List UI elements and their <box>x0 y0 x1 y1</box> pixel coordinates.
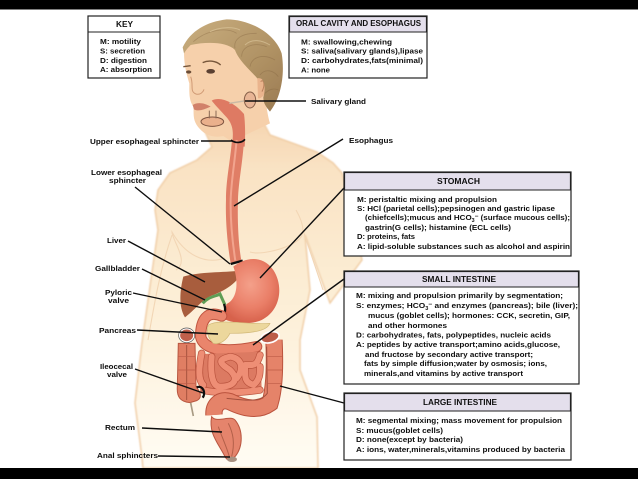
descending and sigmoid colon <box>214 340 275 415</box>
digestive organs <box>177 92 283 462</box>
lower esophageal sphincter <box>231 261 243 264</box>
head <box>183 19 283 142</box>
panel: stomach: (chiefcells);mucus and HCO <box>365 213 465 222</box>
panel: large intestine: A: ions, water,minerals,vitamins produced by bacteria <box>356 445 566 454</box>
panel: small intestine: mucus (goblet cells); hormones: CCK, secretin, GIP, <box>368 311 570 320</box>
panel: key: KEY <box>116 20 134 29</box>
panel: small intestine: S: enzymes; HCO <box>356 301 419 310</box>
anatomical labels: Salivary gland <box>311 97 366 106</box>
anatomical labels: Gallbladder <box>95 264 140 273</box>
anatomical labels: Lower esophageal <box>91 168 162 177</box>
panel: oral cavity and esophagus: ORAL CAVITY AND ESOPHAGUS <box>296 19 422 28</box>
pyloric valve <box>222 304 225 319</box>
anatomical labels: Upper esophageal sphincter <box>90 137 199 146</box>
anatomical labels: Anal sphincters <box>97 451 158 460</box>
anal sphincters <box>227 457 237 462</box>
panel: oral cavity and esophagus: D: carbohydrates,fats(minimal) <box>301 56 424 65</box>
panel: small intestine: and enzymes (pancreas); bile (liver); <box>432 301 578 310</box>
hair strands <box>193 30 278 93</box>
anatomical labels: Ileocecal <box>100 362 133 371</box>
panel: stomach: STOMACH <box>437 177 480 186</box>
panel: stomach: 3 <box>472 218 475 224</box>
chest, arm and abdomen contour lines <box>148 210 323 340</box>
panel: stomach: A: lipid-soluble substances such as alcohol and aspirin <box>357 242 570 251</box>
hair <box>183 19 283 112</box>
leader lines <box>128 101 344 457</box>
anatomical labels: sphincter <box>109 176 146 185</box>
esophagus <box>226 140 244 263</box>
human body figure <box>135 19 362 468</box>
panel: small intestine: M: mixing and propulsion primarily by segmentation; <box>356 291 563 300</box>
bottom black band <box>0 468 638 479</box>
panel: key: M: motility <box>100 37 142 46</box>
panel: small intestine: SMALL INTESTINE <box>422 275 497 284</box>
anatomical labels: Pancreas <box>99 326 136 335</box>
panel: key: A: absorption <box>100 65 152 74</box>
panel: stomach <box>344 172 571 256</box>
nose and lips <box>191 77 204 94</box>
face <box>184 41 270 142</box>
anatomical labels: Esophagus <box>349 136 393 145</box>
panel: small intestine: A: peptides by active transport;amino acids,glucose, <box>356 340 560 349</box>
panel: stomach: gastrin(G cells); histamine (ECL cells) <box>365 223 512 232</box>
anatomical labels: valve <box>107 370 127 379</box>
ascending colon <box>177 343 200 403</box>
panel: large intestine: D: none(except by bacteria) <box>356 435 464 444</box>
panel: oral cavity and esophagus: M: swallowing,chewing <box>301 38 392 46</box>
panel: small intestine: 3 <box>425 306 429 312</box>
pancreas <box>207 322 270 344</box>
panel: large intestine: LARGE INTESTINE <box>423 398 498 407</box>
panel: stomach: S: HCl (parietal cells);pepsinogen and gastric lipase <box>357 204 555 213</box>
torso and arms <box>135 100 362 468</box>
panel: key <box>88 16 160 78</box>
anatomical labels <box>90 97 393 460</box>
anatomical labels: valve <box>108 296 129 305</box>
panel: stomach: D: proteins, fats <box>357 232 415 241</box>
oral cavity, salivary gland and upper esophagus <box>201 92 256 147</box>
panel: small intestine: − <box>428 302 433 308</box>
transverse colon cut end, ascending <box>179 329 194 342</box>
upper esophageal sphincter <box>231 139 245 142</box>
panel: oral cavity and esophagus: A: none <box>301 66 330 74</box>
anatomical labels: Rectum <box>105 423 135 432</box>
anatomical labels: Pyloric <box>105 288 132 297</box>
ileocecal valve <box>197 387 204 398</box>
top black band <box>0 0 638 10</box>
duodenum <box>201 314 257 350</box>
small intestine <box>200 352 262 393</box>
liver <box>180 271 240 317</box>
appendix <box>191 403 193 416</box>
panel: stomach: M: peristaltic mixing and propulsion <box>357 195 497 204</box>
eyebrow and eye <box>183 61 221 67</box>
anatomical labels: Liver <box>107 236 126 245</box>
rectum <box>211 417 241 460</box>
panel: large intestine <box>344 393 571 460</box>
stomach <box>222 259 279 323</box>
panel: large intestine: M: segmental mixing; mass movement for propulsion <box>356 416 562 425</box>
panel: small intestine: fats by simple diffusion;water by osmosis; ions, <box>364 359 547 368</box>
panel: large intestine: S: mucus(goblet cells) <box>356 426 444 435</box>
panel: key: S: secretion <box>100 46 145 56</box>
ear <box>257 75 267 98</box>
panel: small intestine: D: carbohydrates, fats, polypeptides, nucleic acids <box>356 330 551 340</box>
panel: stomach: (surface mucous cells); <box>478 213 570 222</box>
organs group <box>177 139 283 462</box>
panel: oral cavity and esophagus <box>289 16 427 78</box>
transverse colon cut end, descending <box>260 330 280 345</box>
panel: small intestine: minerals,and vitamins by active transport <box>364 369 524 378</box>
panel: small intestine <box>344 271 579 384</box>
panel: small intestine: and other hormones <box>368 321 447 330</box>
panel: key: D: digestion <box>100 56 147 65</box>
gallbladder and bile ducts <box>203 294 225 305</box>
panel: oral cavity and esophagus: S: saliva(salivary glands),lipase <box>301 46 423 56</box>
panel: small intestine: and fructose by secondary active transport; <box>365 350 533 359</box>
panel: stomach: − <box>475 214 479 220</box>
